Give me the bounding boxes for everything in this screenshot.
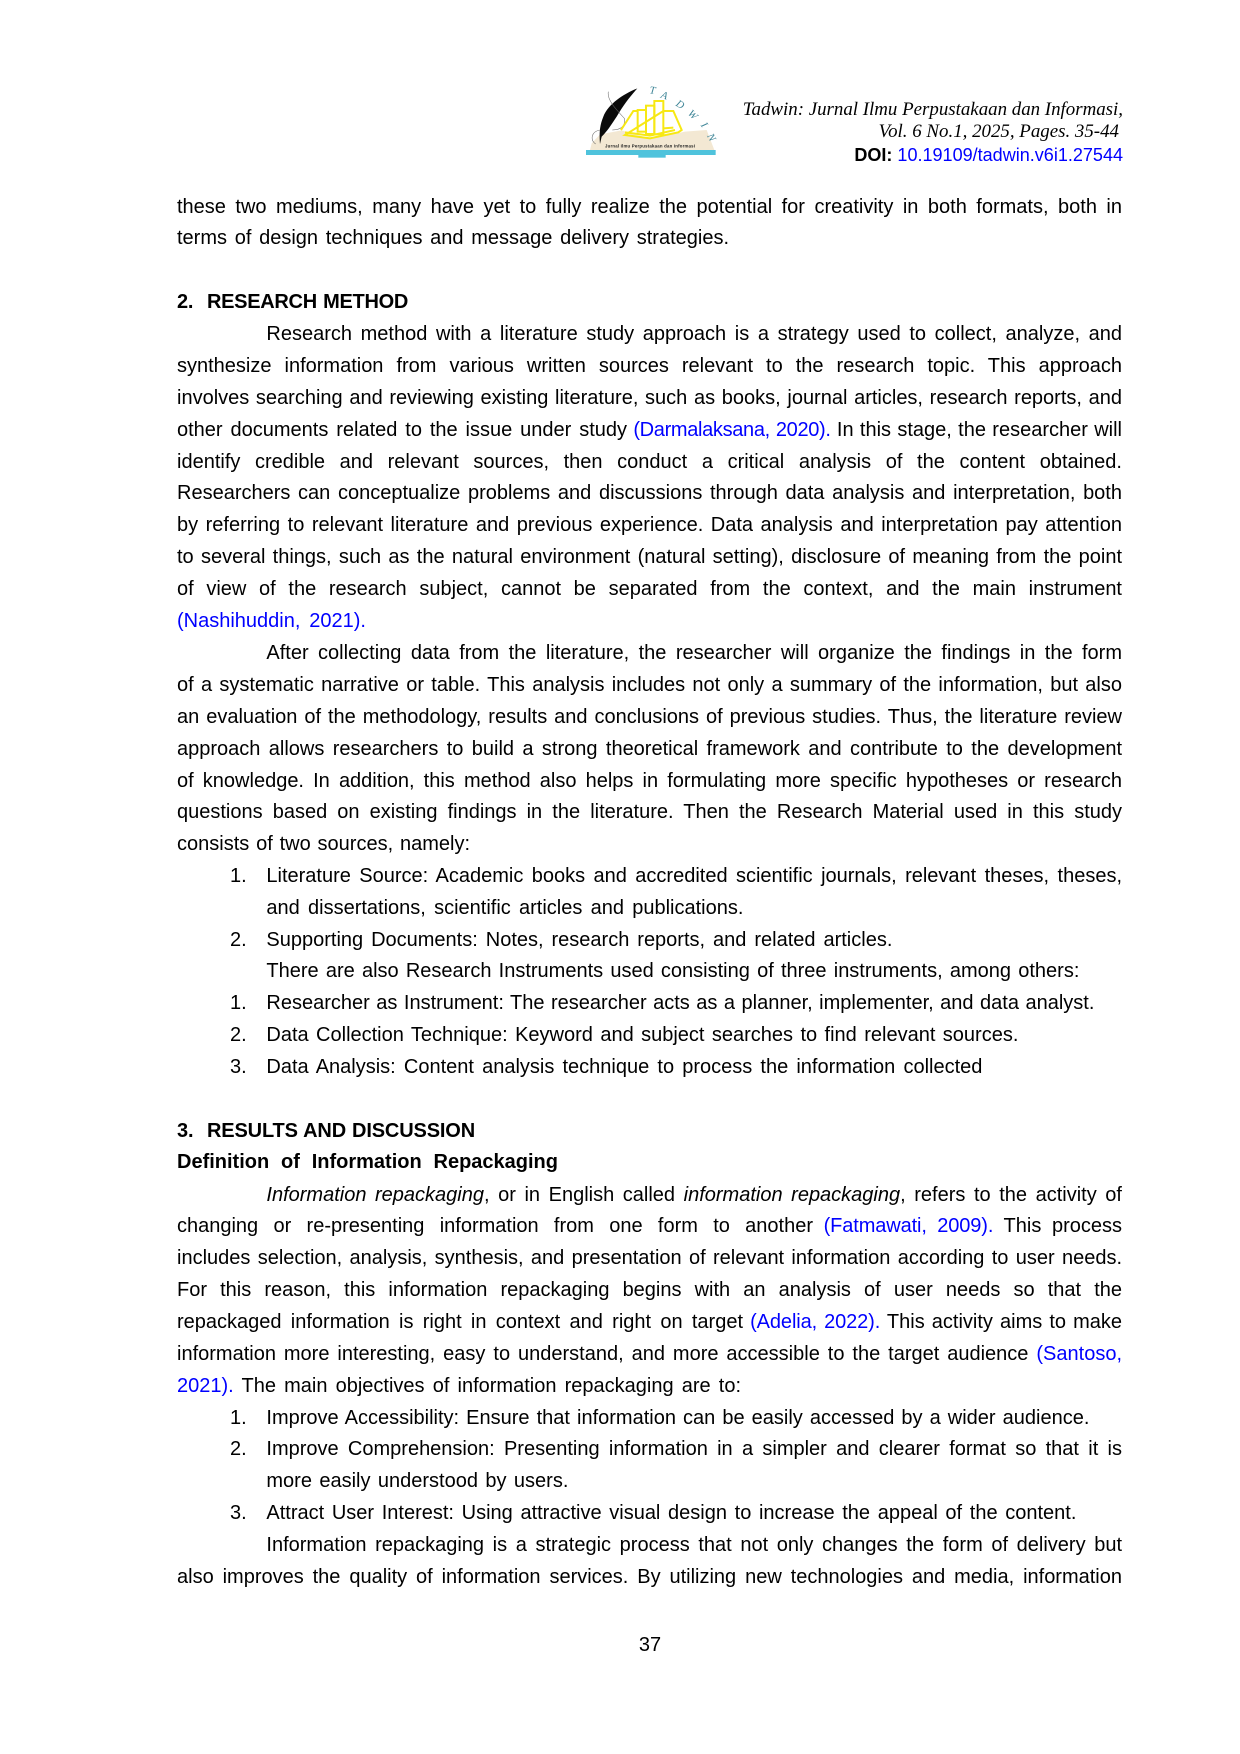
icon: Tadwin journal logo: A	[658, 90, 669, 103]
text block: definition paragraph: For this reason, this information repackaging begins with an analysis of user needs so that the	[177, 1279, 1122, 1301]
icon: Tadwin journal logo: W	[685, 108, 700, 123]
text block: research method paragraph 1: involves searching and reviewing existing literature, such as books, journal articles, research reports, and	[177, 387, 1122, 409]
text block: research method paragraph 1	[177, 323, 1122, 632]
text block: strategic process paragraph: Information repackaging is a strategic process that not only changes the form of delivery but	[266, 1534, 1122, 1556]
text block: research method paragraph 2: of a systematic narrative or table. This analysis includes not only a summary of the information, but also	[177, 674, 1122, 696]
text block: research method paragraph 2: an evaluation of the methodology, results and conclusions of previous studies. Thus, the literature review	[177, 706, 1122, 728]
text block: definition paragraph: 2021). The main objectives of information repackaging are to:	[177, 1375, 741, 1397]
list: research instruments: 3.	[230, 1056, 247, 1078]
icon: Tadwin journal logo	[586, 85, 718, 158]
list: research instruments: Data Analysis: Content analysis technique to process the information collected	[266, 1056, 982, 1078]
list: research material sources: 2.	[230, 929, 247, 951]
text block: research method paragraph 2	[177, 642, 1122, 855]
header: journal citation	[743, 99, 1123, 165]
heading: 2. Research Method: RESEARCH METHOD	[207, 291, 408, 313]
list: research instruments: 2.	[230, 1024, 247, 1046]
list: objectives of information repackaging: 1.	[230, 1407, 247, 1429]
page number: 37	[639, 1634, 661, 1656]
text block: definition paragraph: changing or re-presenting information from one form to another	[177, 1215, 813, 1237]
list: objectives of information repackaging	[230, 1407, 1122, 1524]
heading: 2. Research Method: 2.	[177, 291, 193, 313]
text block: research method paragraph 2: questions based on existing findings in the literature. Then the Research Material used in this study	[177, 801, 1122, 823]
text block: research method paragraph 2: consists of two sources, namely:	[177, 833, 470, 855]
list: objectives of information repackaging: Improve Comprehension: Presenting information in a simpler and clearer format so that it is	[266, 1438, 1122, 1460]
text block: definition paragraph: includes selection, analysis, synthesis, and presentation of relevant information according to user needs.	[177, 1247, 1122, 1269]
list: research material sources	[230, 865, 1122, 951]
text block: strategic process paragraph: also improves the quality of information services. By utilizing new technologies and media, information	[177, 1566, 1122, 1588]
list: research instruments: Data Collection Technique: Keyword and subject searches to find relevant sources.	[266, 1024, 1018, 1046]
list: research instruments	[230, 992, 1094, 1078]
list: objectives of information repackaging: Attract User Interest: Using attractive visual design to increase the appeal of the content.	[266, 1502, 1076, 1524]
list: objectives of information repackaging: more easily understood by users.	[266, 1470, 568, 1492]
text block: research method paragraph 1: by referring to relevant literature and previous experience. Data analysis and interpretation pay attention	[177, 514, 1122, 536]
subheading: Definition of Information Repackaging: Definition of Information Repackaging	[177, 1151, 558, 1173]
text block: definition paragraph: (Adelia, 2022). This activity aims to make	[750, 1311, 1122, 1333]
text block: research method paragraph 2: of knowledge. In addition, this method also helps in formulating more specific hypotheses or research	[177, 770, 1122, 792]
text block: continued paragraph: terms of design techniques and message delivery strategies.	[177, 227, 729, 249]
text block: continued paragraph	[177, 196, 1122, 249]
list: research instruments: 1.	[230, 992, 247, 1014]
icon: Tadwin journal logo: Jurnal Ilmu Perpustakaan dan Informasi	[605, 144, 695, 149]
icon: Tadwin journal logo: I	[697, 120, 709, 130]
list: research material sources: Literature Source: Academic books and accredited scientific journals, relevant theses, theses,	[266, 865, 1122, 887]
header: journal citation: DOI: 10.19109/tadwin.v6i1.27544	[854, 145, 1123, 165]
list: objectives of information repackaging: Improve Accessibility: Ensure that information can be easily accessed by a wider audience.	[266, 1407, 1089, 1429]
heading: 3. Results and Discussion: 3.	[177, 1120, 193, 1142]
list: objectives of information repackaging: 2.	[230, 1438, 247, 1460]
text block: research method paragraph 2: After collecting data from the literature, the researcher will organize the findings in the form	[266, 642, 1122, 664]
text block: continued paragraph: these two mediums, many have yet to fully realize the potential for creativity in both formats, both in	[177, 196, 1122, 218]
header: journal citation: Vol. 6 No.1, 2025, Pages. 35-44	[879, 121, 1119, 142]
icon: Tadwin journal logo: N	[704, 131, 718, 144]
text block: definition paragraph	[177, 1184, 1122, 1397]
icon: Tadwin journal logo: D	[673, 98, 686, 112]
text block: research method paragraph 1: of view of the research subject, cannot be separated from the context, and the main instrument	[177, 578, 1122, 600]
text block: research method paragraph 1: other documents related to the issue under study	[177, 419, 627, 441]
text block: research method paragraph 1: synthesize information from various written sources relevant to the research topic. This approach	[177, 355, 1122, 377]
text block: definition paragraph: repackaged information is right in context and right on target	[177, 1311, 743, 1333]
header: journal citation: Tadwin: Jurnal Ilmu Perpustakaan dan Informasi,	[743, 99, 1123, 120]
text block: strategic process paragraph	[177, 1534, 1122, 1588]
list: research material sources: 1.	[230, 865, 247, 887]
heading: 3. Results and Discussion: RESULTS AND DISCUSSION	[207, 1120, 475, 1142]
text block: research method paragraph 1: (Darmalaksana, 2020). In this stage, the researcher will	[633, 419, 1122, 441]
text block: definition paragraph: information more interesting, easy to understand, and more accessible to the target audience (Santoso,	[177, 1343, 1122, 1365]
text block: research instruments intro: There are also Research Instruments used consisting of three instruments, among others:	[266, 960, 1079, 982]
text block: definition paragraph: Information repackaging, or in English called information repackaging, refers to the activity of	[266, 1184, 1122, 1206]
text block: research method paragraph 1: Researchers can conceptualize problems and discussions through data analysis and interpretation, both	[177, 482, 1122, 504]
text block: research method paragraph 1: (Nashihuddin, 2021).	[177, 610, 366, 632]
list: research material sources: Supporting Documents: Notes, research reports, and related articles.	[266, 929, 892, 951]
list: research material sources: and dissertations, scientific articles and publications.	[266, 897, 743, 919]
text block: research method paragraph 1: identify credible and relevant sources, then conduct a critical analysis of the content obtained.	[177, 451, 1122, 473]
text block: definition paragraph: (Fatmawati, 2009). This process	[824, 1215, 1122, 1237]
text block: research method paragraph 1: to several things, such as the natural environment (natural setting), disclosure of meaning from the point	[177, 546, 1122, 568]
list: research instruments: Researcher as Instrument: The researcher acts as a planner, implementer, and data analyst.	[266, 992, 1094, 1014]
text block: research method paragraph 1: Research method with a literature study approach is a strategy used to collect, analyze, and	[266, 323, 1122, 345]
icon: Tadwin journal logo: T	[649, 85, 657, 97]
text block: research method paragraph 2: approach allows researchers to build a strong theoretical framework and contribute to the development	[177, 738, 1122, 760]
list: objectives of information repackaging: 3.	[230, 1502, 247, 1524]
